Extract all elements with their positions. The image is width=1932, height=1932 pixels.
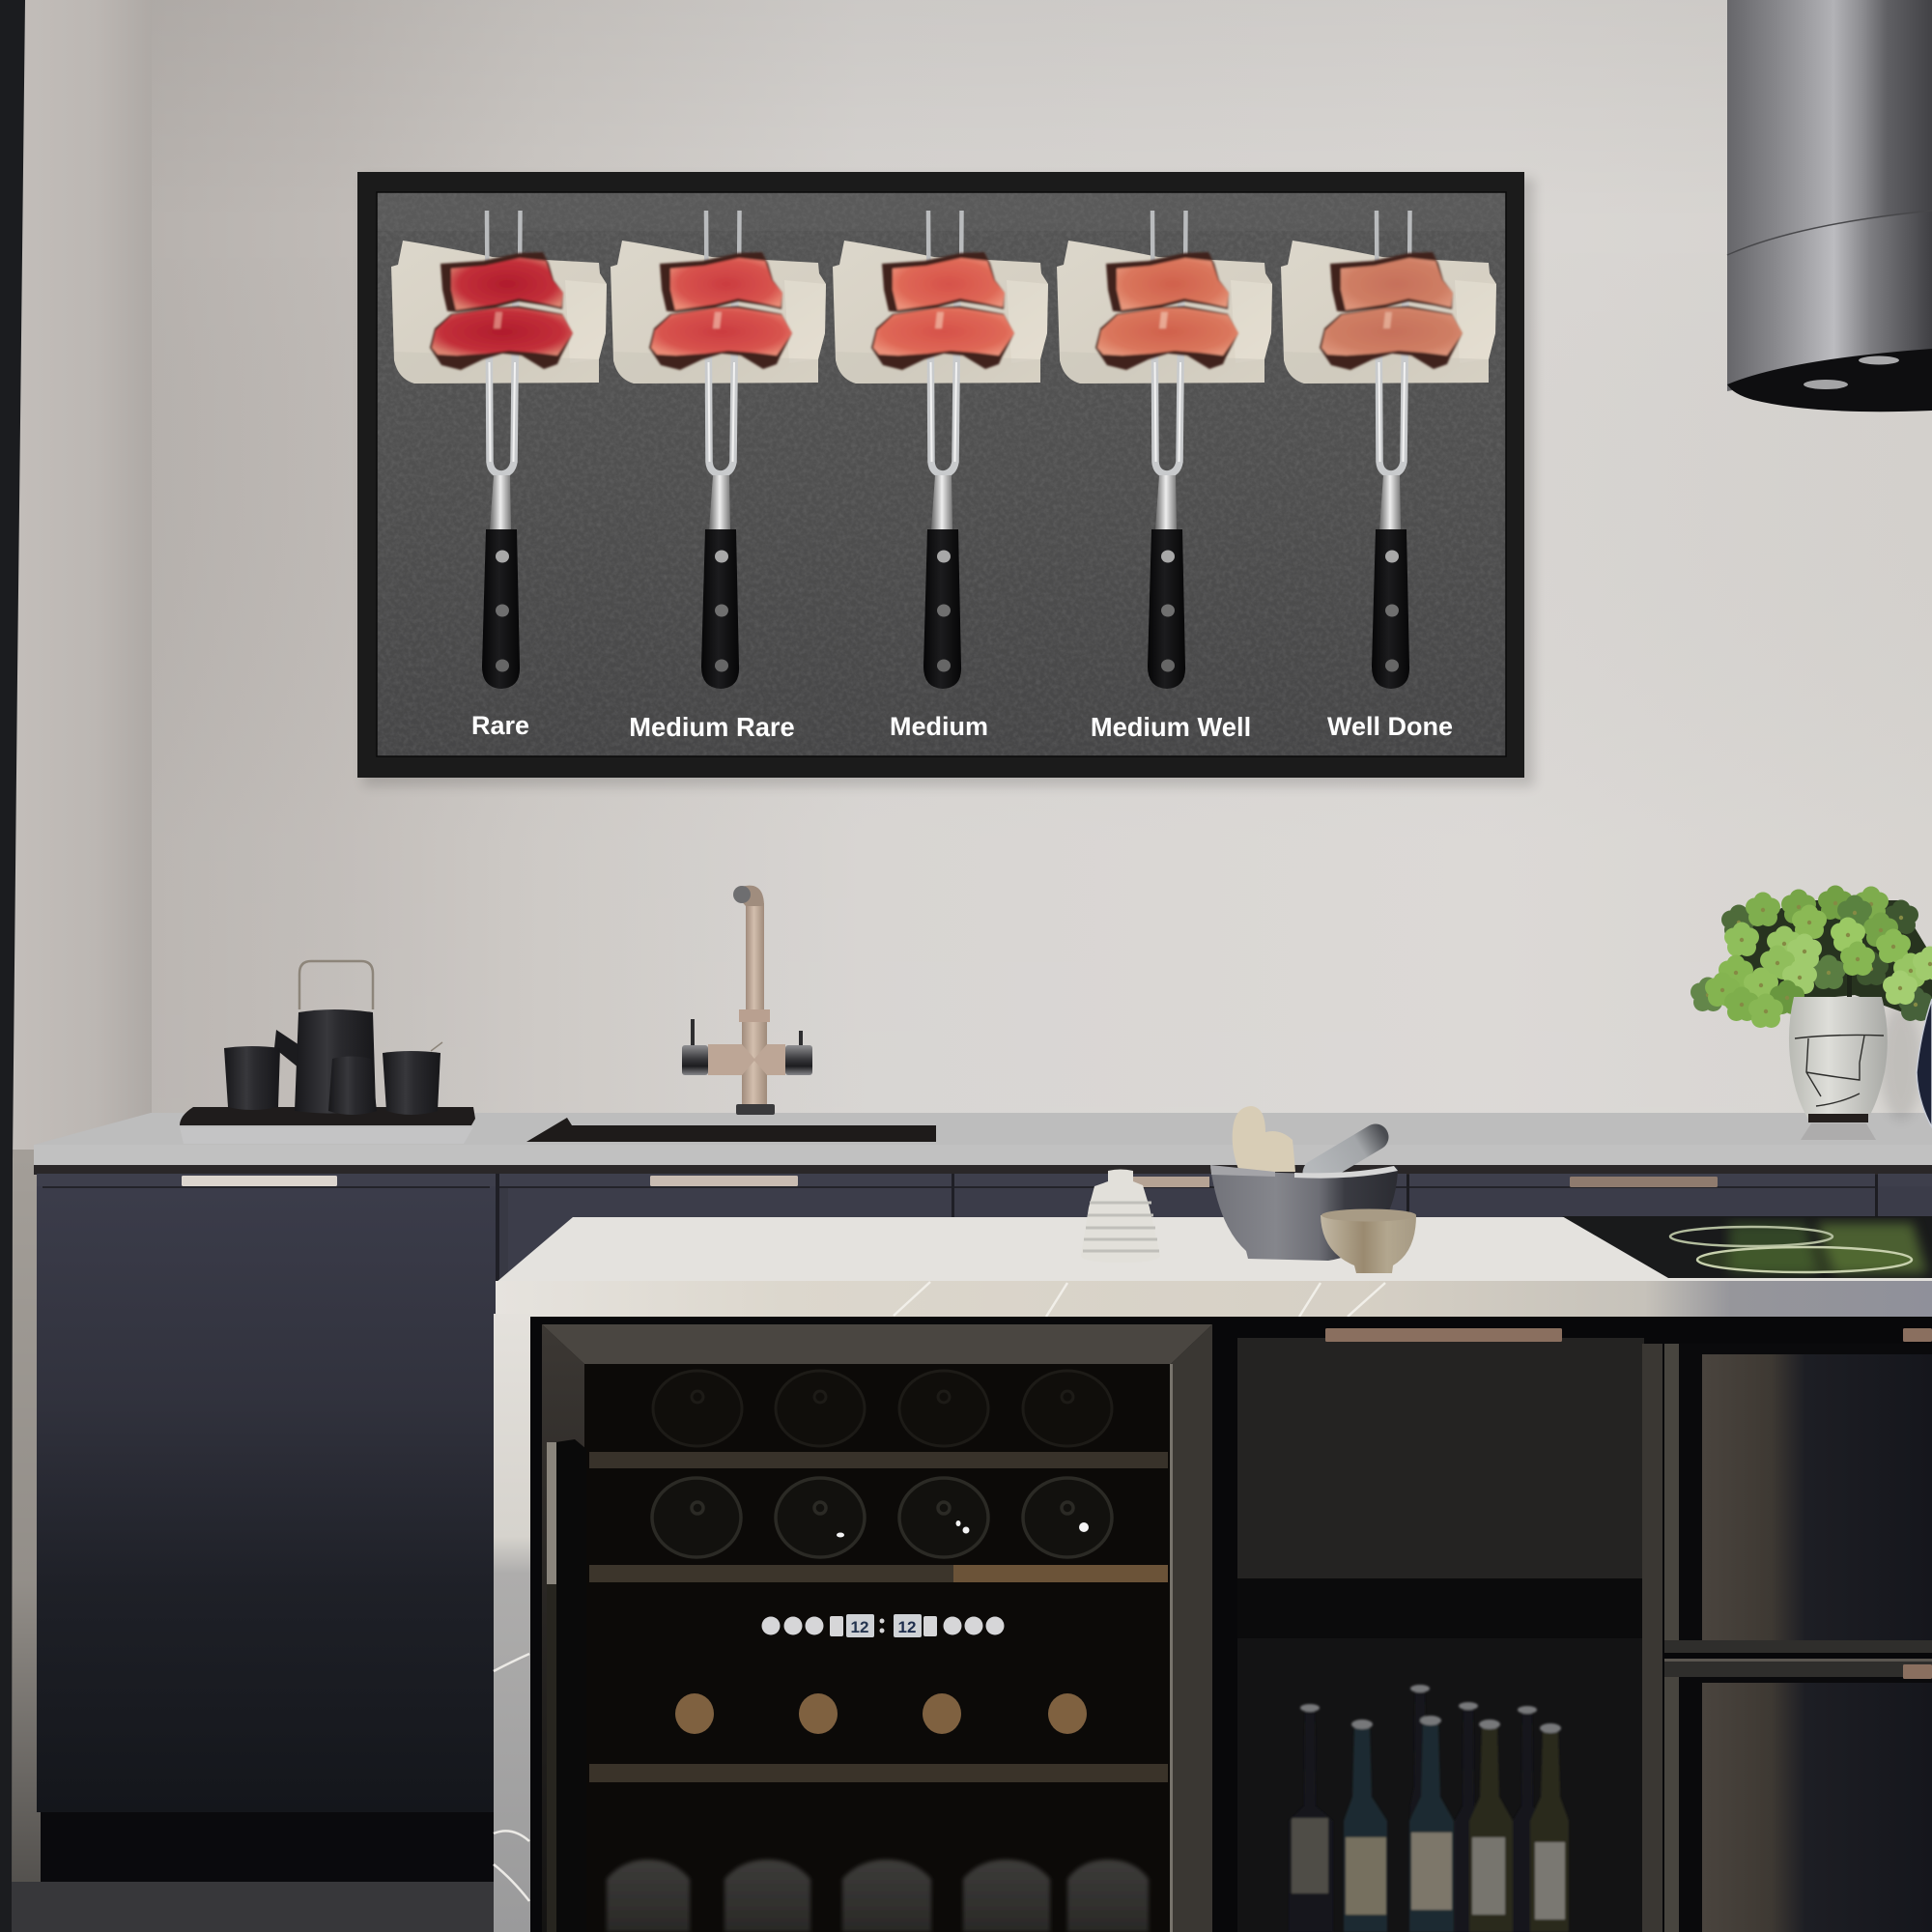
right bezel (1171, 1324, 1212, 1932)
door 1 (37, 1174, 496, 1812)
bottle caps (1300, 1685, 1561, 1733)
left cup (224, 1046, 280, 1110)
worktop veins (894, 1282, 1385, 1317)
kettle handle (299, 961, 373, 1009)
right cabinet doors (1664, 1328, 1932, 1932)
island side leg (494, 1314, 530, 1932)
right cup (383, 1051, 440, 1115)
marble vase (1789, 997, 1888, 1140)
label: Medium Rare: Medium Rare (629, 712, 795, 742)
upper door (1664, 1344, 1932, 1653)
second row of bottle bases (652, 1478, 1112, 1557)
steak 2: medium rare (611, 211, 826, 689)
control panel display (761, 1614, 1005, 1637)
vase shadow (1880, 1005, 1922, 1121)
toe kick (41, 1812, 495, 1882)
fridge interior (584, 1364, 1171, 1932)
island dark base (530, 1317, 1932, 1932)
upper counter (34, 1113, 1932, 1165)
steak 3: medium (833, 211, 1048, 689)
steak 4: medium well (1057, 211, 1272, 689)
door handles (1903, 1328, 1932, 1679)
lower door (1664, 1659, 1932, 1932)
bottom row bottles (607, 1860, 1149, 1932)
base cabinets behind island (34, 1163, 1932, 1882)
bottles behind glass (1289, 1685, 1569, 1932)
green plant in marble vase (1690, 885, 1932, 1140)
mortar bowl (1210, 1167, 1398, 1261)
bottle labels (1292, 1818, 1565, 1919)
rose gold mixer tap (682, 886, 812, 1115)
range hood (1727, 0, 1932, 412)
control panel display: 12 (851, 1618, 868, 1636)
front bottles (1344, 1723, 1454, 1932)
frame shadow (363, 178, 1534, 786)
back bottles (1289, 1690, 1542, 1932)
top row of bottle bases (653, 1371, 1112, 1446)
control panel display: 12 (898, 1618, 916, 1636)
cabinet handles (182, 1176, 1718, 1187)
label: Medium Well: Medium Well (1091, 712, 1251, 742)
tray (180, 1107, 475, 1125)
door 5 (1878, 1174, 1932, 1232)
steak 5: well done (1281, 211, 1496, 689)
striped blue vase edge (1917, 999, 1932, 1127)
left bezel (542, 1324, 584, 1932)
small ceramic cup (1321, 1209, 1416, 1273)
central drawer unit with bottles (1237, 1328, 1662, 1932)
stone background (377, 192, 1506, 756)
door 2 (496, 1174, 954, 1290)
small cup (328, 1057, 377, 1115)
mortar and pestle with ginger (1210, 1106, 1398, 1261)
ceramic striped bottle (1081, 1169, 1160, 1263)
cork row (675, 1693, 1087, 1734)
door 4 (1409, 1174, 1875, 1232)
bottle glints (837, 1520, 1089, 1538)
undermount sink (526, 1118, 936, 1142)
pestle (1316, 1137, 1376, 1173)
kettle (274, 1009, 376, 1114)
induction hob (1562, 1216, 1932, 1278)
wall (0, 0, 1932, 1121)
cabinet shadow rail (34, 1163, 1932, 1175)
stem and leaf backdrop (1734, 900, 1932, 1012)
wooden shelves (589, 1452, 1168, 1782)
steak 1: rare (391, 211, 607, 689)
black tea set on tray (180, 961, 475, 1125)
label: Rare: Rare (471, 711, 529, 740)
black frame (357, 172, 1524, 778)
copper handle (1325, 1328, 1562, 1342)
ginger (1233, 1106, 1295, 1172)
wine fridge (542, 1324, 1212, 1932)
floor (12, 1882, 497, 1932)
label: Well Done: Well Done (1327, 712, 1453, 741)
door handle (547, 1439, 586, 1932)
label: Medium: Medium (890, 712, 988, 741)
door 3 (954, 1174, 1406, 1232)
cabinet backing (37, 1163, 1932, 1260)
hydrangea flowers (1690, 885, 1932, 1028)
spoon (431, 1042, 442, 1051)
top bezel (542, 1324, 1212, 1364)
framed steak doneness artwork (357, 172, 1534, 786)
island worktop (496, 1217, 1932, 1317)
left wall return and dark edge column (0, 0, 152, 1932)
